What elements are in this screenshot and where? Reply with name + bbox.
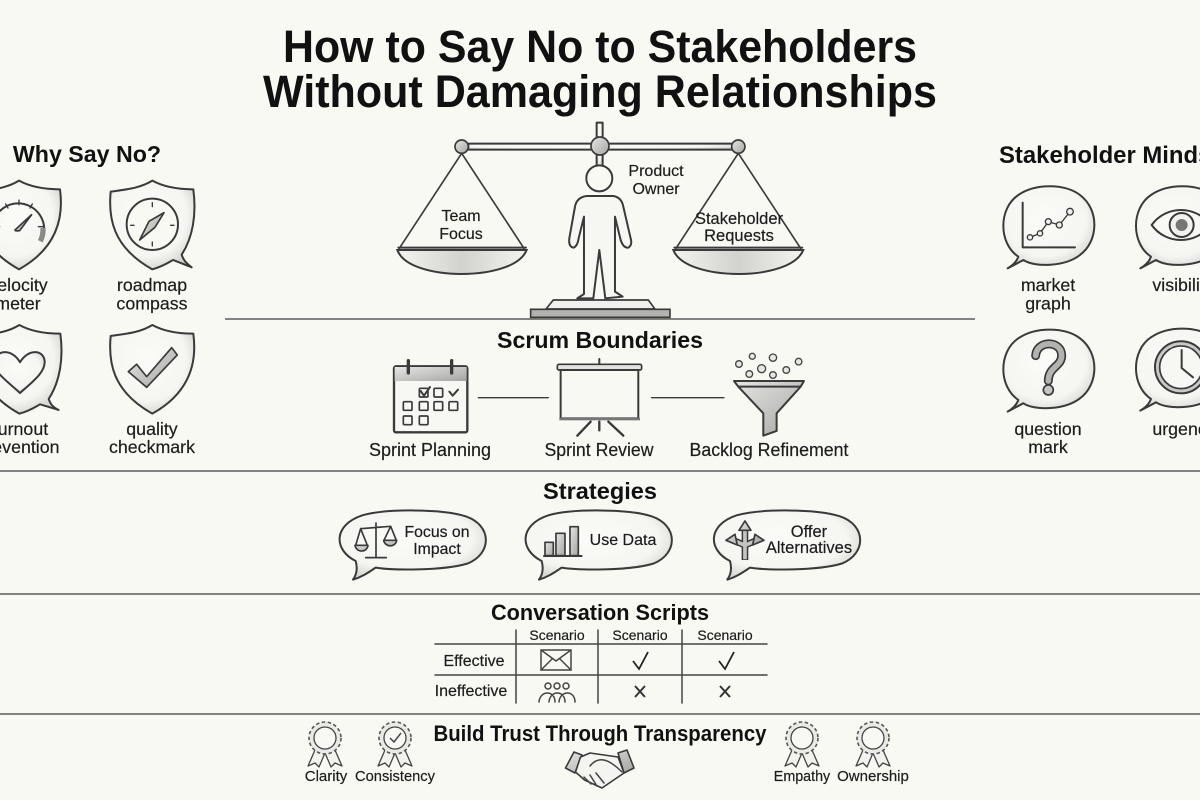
label: team focus: Focus — [439, 226, 483, 243]
label: product owner: Product — [628, 163, 684, 180]
label: roadmap compass: compass — [116, 294, 188, 314]
icon: question mark — [1003, 330, 1094, 412]
icon: quality checkmark — [110, 325, 194, 414]
column headers — [529, 627, 753, 643]
label: roadmap compass: roadmap — [117, 275, 187, 295]
icon: checks — [633, 652, 734, 669]
label: focus on impact: Impact — [413, 541, 461, 558]
icon: eye — [1136, 186, 1200, 268]
column headers: Scenario — [612, 627, 668, 643]
label: team focus: Team — [441, 208, 481, 225]
icon: handshake — [566, 750, 634, 788]
row label: ineffective: Ineffective — [435, 683, 507, 700]
label: empathy: Empathy — [774, 769, 831, 785]
label: clarity: Clarity — [305, 768, 348, 785]
heading: Strategies — [543, 478, 657, 504]
bubble: focus on impact — [340, 510, 486, 580]
panel: scrum boundaries — [369, 327, 848, 460]
label: use data: Use Data — [590, 532, 656, 549]
bubble icons — [1003, 186, 1200, 412]
connector — [652, 396, 724, 400]
label: market graph: graph — [1025, 294, 1071, 314]
award: empathy — [785, 722, 819, 767]
panel: why say no — [0, 141, 195, 457]
connector — [478, 396, 548, 400]
title: How to Say No to Stakeholders — [283, 21, 917, 72]
title: Without Damaging Relationships — [263, 66, 937, 117]
scrum icons — [394, 353, 804, 436]
award: clarity — [308, 722, 342, 767]
column headers: Scenario — [697, 627, 753, 643]
column headers: Scenario — [529, 627, 585, 643]
icon: envelope — [541, 650, 571, 670]
bubble: use data — [526, 510, 672, 580]
label: sprint review: Sprint Review — [544, 440, 654, 460]
label: product owner: Owner — [632, 181, 680, 198]
bubble: offer alternatives — [714, 510, 860, 580]
icon: heart — [0, 325, 62, 414]
label: question mark: mark — [1028, 437, 1068, 457]
heading: Conversation Scripts — [491, 600, 709, 625]
row label: effective: Effective — [444, 653, 504, 670]
label: stakeholder requests: Stakeholder — [695, 210, 783, 228]
label: market graph: market — [1021, 275, 1075, 295]
label: focus on impact: Focus on — [405, 524, 469, 541]
icon: crosses — [635, 686, 730, 697]
label: question mark: question — [1014, 419, 1082, 439]
label: sprint planning: Sprint Planning — [369, 440, 491, 460]
panel: stakeholder mindset — [999, 142, 1200, 457]
label: backlog refinement: Backlog Refinement — [690, 440, 848, 460]
panel: balance scale with product owner — [397, 123, 803, 317]
icon: clock — [1136, 329, 1200, 411]
label: stakeholder requests: Requests — [704, 227, 774, 245]
label: ownership: Ownership — [837, 768, 909, 785]
panel: build trust through transparency — [305, 721, 909, 788]
panel: strategies — [340, 478, 860, 580]
icon: roadmap compass — [110, 181, 194, 269]
title — [263, 21, 937, 117]
heading: Build Trust Through Transparency — [434, 721, 767, 746]
table — [435, 627, 767, 703]
label: consistency: Consistency — [355, 769, 436, 785]
label: offer alternatives: Offer — [791, 523, 827, 541]
award: ownership — [856, 722, 890, 767]
icon: funnel — [734, 353, 804, 436]
icon: people — [539, 683, 575, 702]
label: quality checkmark: quality — [126, 419, 178, 439]
heading: Scrum Boundaries — [497, 327, 703, 353]
icon: market graph — [1003, 186, 1094, 268]
icon: velocity meter — [0, 181, 61, 269]
label: offer alternatives: Alternatives — [766, 539, 852, 557]
heading: Why Say No? — [13, 141, 161, 167]
icon: calendar — [394, 361, 467, 432]
shield icons — [0, 181, 194, 414]
award: consistency — [378, 722, 412, 767]
panel: conversation scripts — [435, 600, 767, 703]
strategy bubbles — [340, 510, 860, 580]
label: quality checkmark: checkmark — [109, 437, 195, 457]
icon: projector screen — [557, 359, 642, 436]
scale drawing — [397, 123, 803, 317]
